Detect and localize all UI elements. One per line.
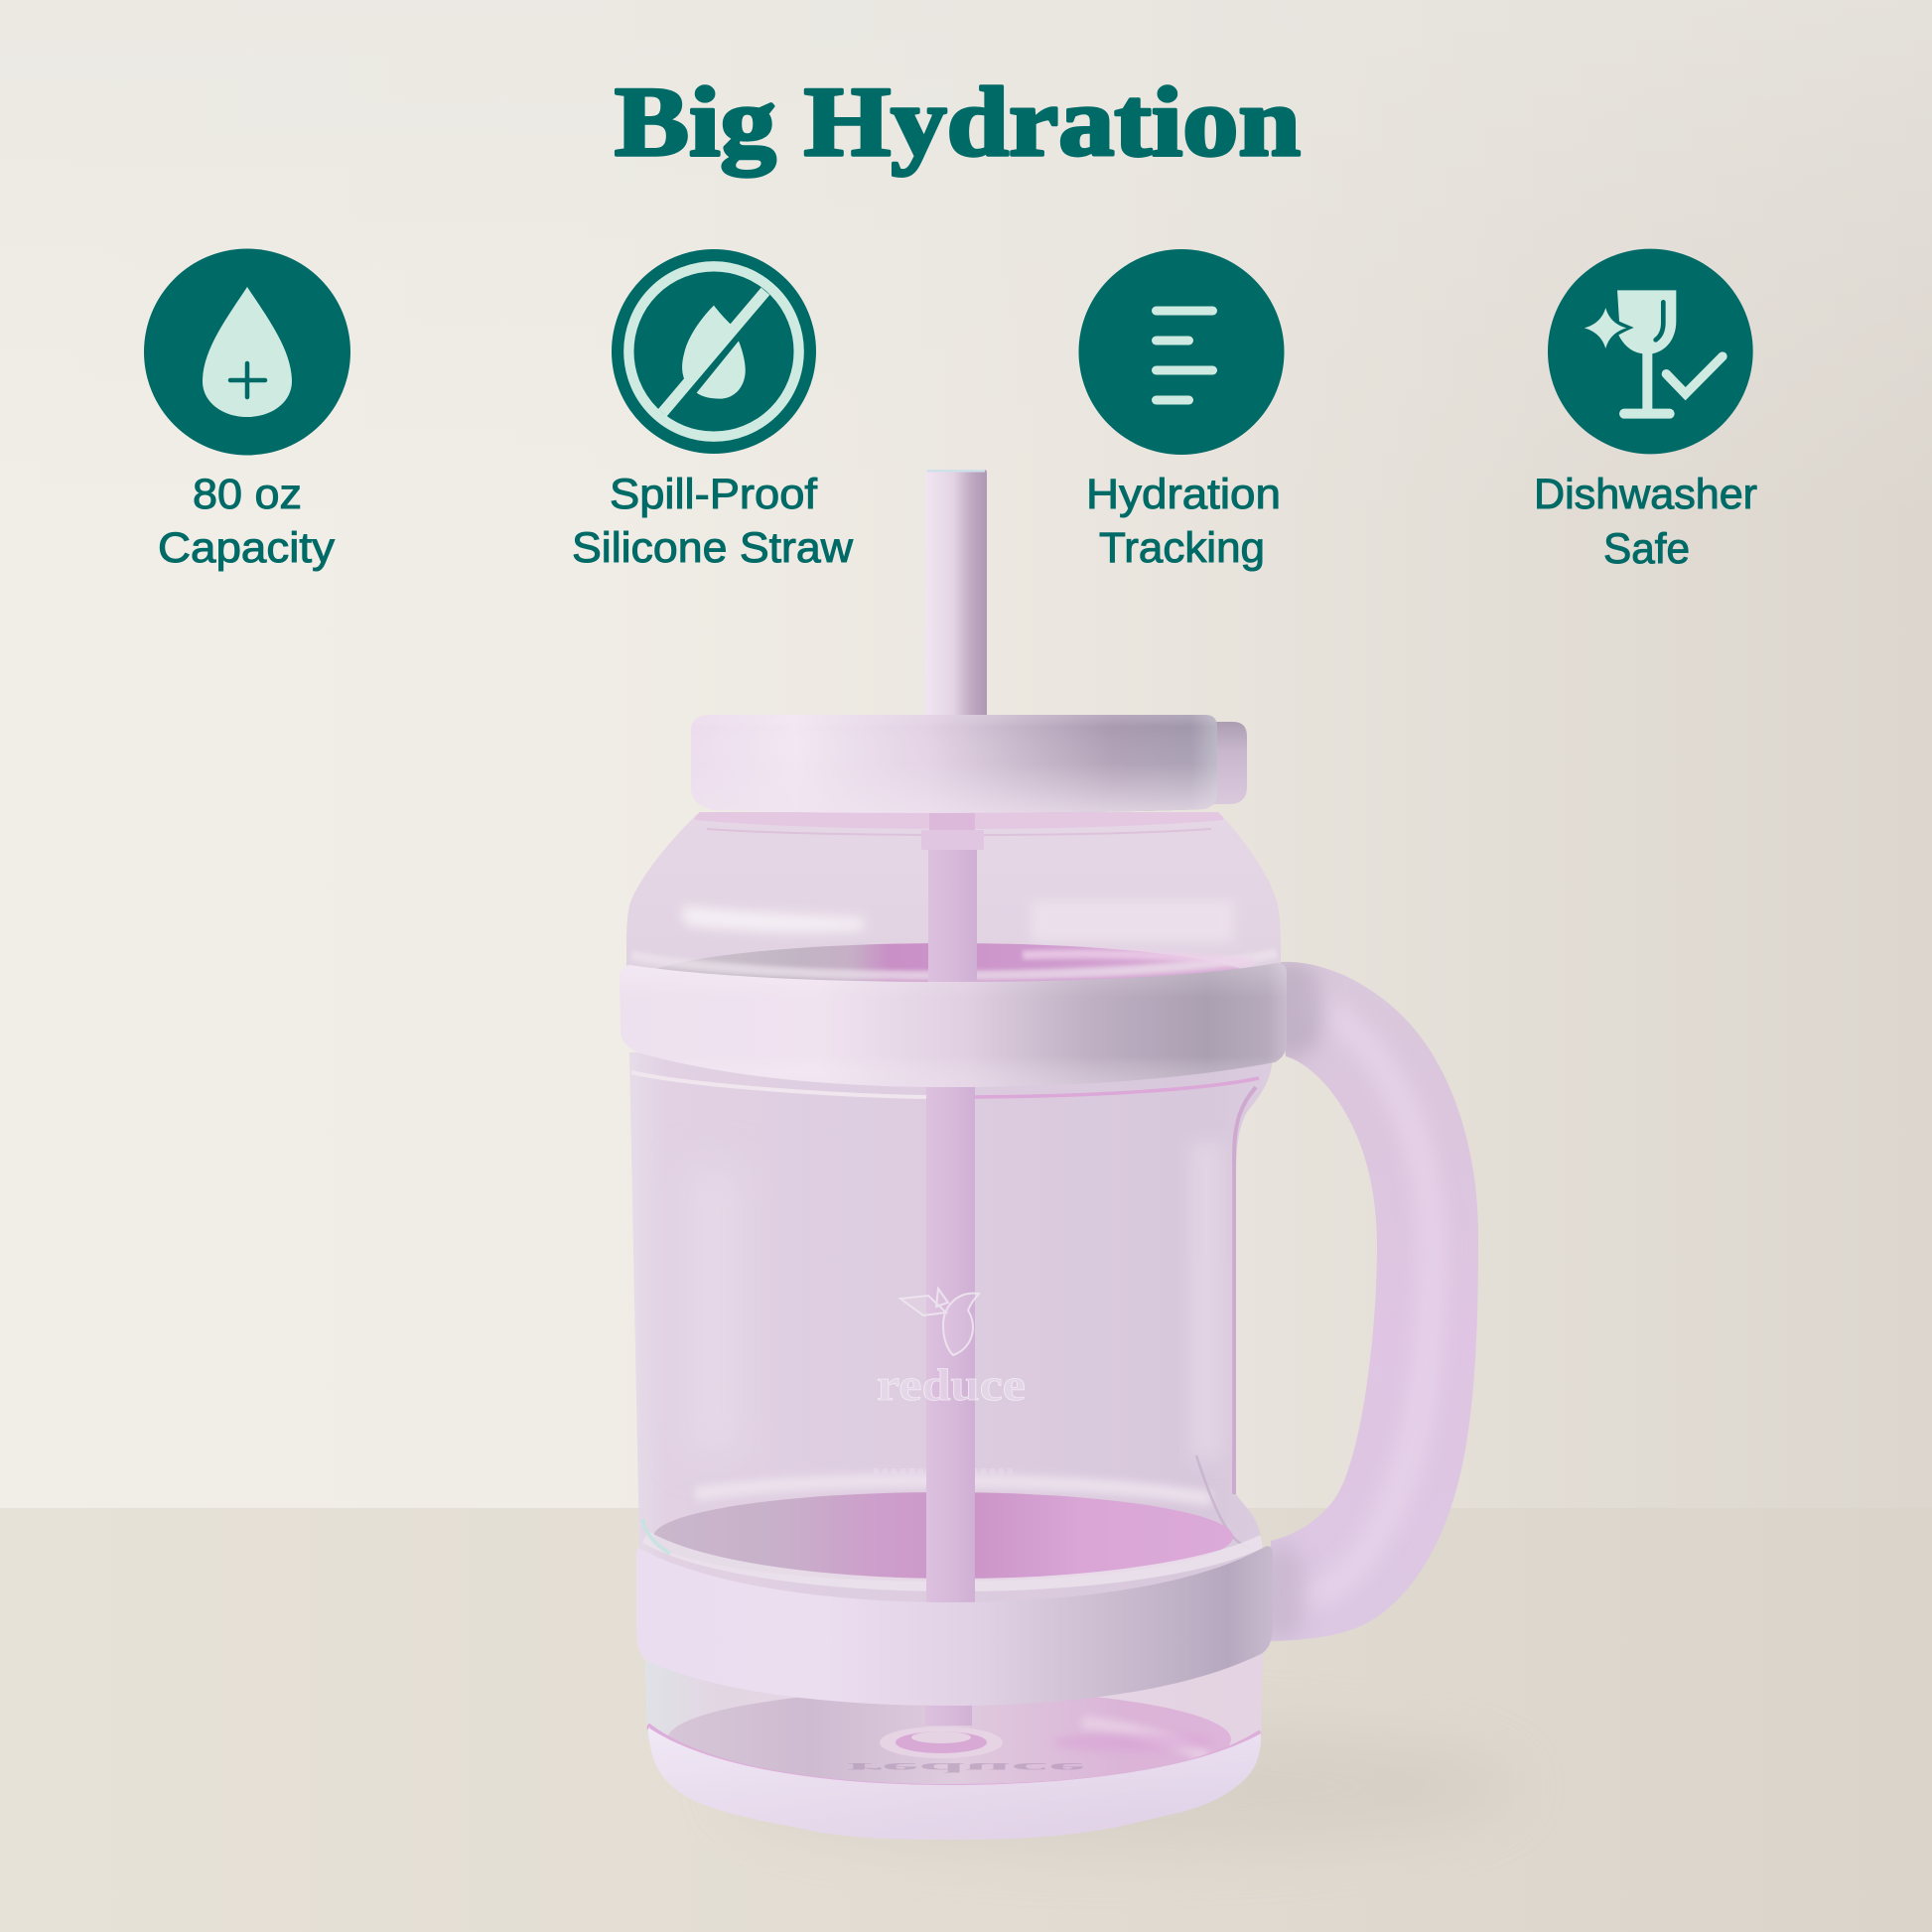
panel: hydration tracking: [1078, 249, 1285, 572]
embossed brand logo: [877, 1289, 1026, 1410]
icon: water drop with plus: [144, 248, 350, 455]
floor surface: [0, 1508, 1932, 1932]
upper jar glass: [626, 812, 1281, 982]
straw inside jar: [921, 812, 984, 1608]
label: Dishwasher Safe: Dishwasher: [1534, 471, 1757, 518]
icon: sparkling glass with check: [1548, 249, 1753, 454]
icon: crossed-out drop: [612, 249, 816, 454]
base glass: reduce: [846, 1760, 1087, 1774]
embossed brand logo: reduce: [877, 1359, 1026, 1410]
title: Big Hydration: [615, 67, 1301, 177]
label: 80 oz Capacity: Capacity: [158, 524, 336, 572]
lower silicone band: [636, 1546, 1273, 1706]
label: Hydration Tracking: [1086, 471, 1281, 572]
product: lilac tumbler mug: [620, 470, 1478, 1840]
wall top tone: [0, 0, 1932, 516]
panel: 80 oz capacity: [144, 248, 350, 572]
label: Hydration Tracking: Tracking: [1099, 524, 1265, 572]
background wall: [0, 0, 1932, 1509]
silicone foot: [648, 1727, 1261, 1840]
label: 80 oz Capacity: [158, 471, 336, 572]
upper silicone band: [620, 963, 1287, 1087]
label: 80 oz Capacity: 80 oz: [193, 471, 302, 518]
label: Spill-Proof Silicone Straw: Spill-Proof: [610, 471, 818, 518]
label: Hydration Tracking: Hydration: [1086, 471, 1281, 518]
icon: measurement lines: [1078, 249, 1285, 455]
lid tab: [1213, 722, 1247, 804]
straw above lid: [924, 470, 987, 717]
label: Dishwasher Safe: [1534, 471, 1757, 573]
lid: [691, 715, 1217, 813]
handle: [1255, 961, 1478, 1643]
label: Dishwasher Safe: Safe: [1603, 525, 1690, 573]
label: Spill-Proof Silicone Straw: [572, 471, 854, 572]
panel: spill-proof silicone straw: [572, 249, 854, 572]
floor shadow: [725, 1723, 1519, 1852]
main jar glass: [629, 1052, 1273, 1648]
panel: dishwasher safe: [1534, 249, 1757, 573]
label: Spill-Proof Silicone Straw: Silicone Straw: [572, 524, 854, 572]
base glass: [645, 1653, 1263, 1785]
